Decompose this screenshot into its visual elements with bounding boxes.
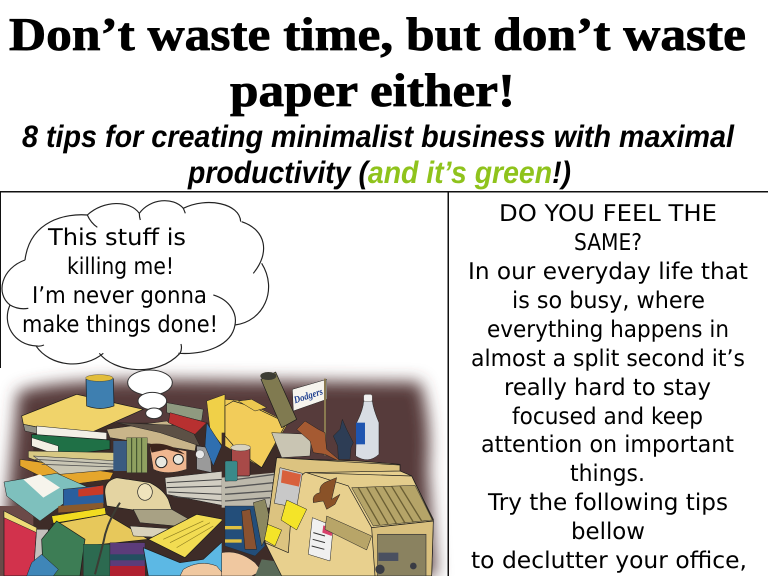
cloud speech text: This stuff is <box>47 225 186 251</box>
right text panel <box>468 201 748 574</box>
title: paper either! <box>230 65 515 117</box>
right text panel: really hard to stay <box>504 375 711 401</box>
cloud speech text <box>22 225 218 338</box>
right text panel: is so busy, where <box>512 288 705 314</box>
cloud speech text: I’m never gonna <box>32 283 207 309</box>
illustration: cluttered office desk <box>0 372 436 576</box>
left pile of books and papers <box>0 375 227 576</box>
right text panel: SAME? <box>574 230 642 256</box>
subtitle: 8 tips for creating minimalist business with maximal <box>22 119 735 154</box>
right text panel: In our everyday life that <box>468 259 748 285</box>
right side: computer, toys and bottle <box>222 372 433 576</box>
title <box>9 9 746 117</box>
right text panel: focused and keep <box>512 404 703 430</box>
thought bubble cloud <box>2 201 269 419</box>
right text panel: things. <box>570 461 645 487</box>
cloud outline arcs <box>2 201 269 370</box>
right side: computer, toys and bottle: Dodgers <box>292 386 324 406</box>
right text panel: almost a split second it’s <box>471 346 745 372</box>
dark blurred wall backdrop <box>0 380 436 576</box>
right text panel: DO YOU FEEL THE <box>499 201 717 227</box>
right text panel: Try the following tips <box>487 490 728 516</box>
right text panel: to declutter your office, <box>471 548 747 574</box>
subtitle: productivity (and it’s green!) <box>187 155 571 190</box>
cloud speech text: make things done! <box>22 312 218 338</box>
title: Don’t waste time, but don’t waste <box>9 9 746 61</box>
subtitle <box>22 119 735 190</box>
panel frame lines <box>0 191 768 576</box>
right text panel: bellow <box>571 519 645 545</box>
right text panel: everything happens in <box>487 317 729 343</box>
small thought bubbles <box>128 370 172 419</box>
right text panel: attention on important <box>481 432 734 458</box>
cloud fill <box>2 201 269 370</box>
cloud speech text: killing me! <box>67 254 174 280</box>
